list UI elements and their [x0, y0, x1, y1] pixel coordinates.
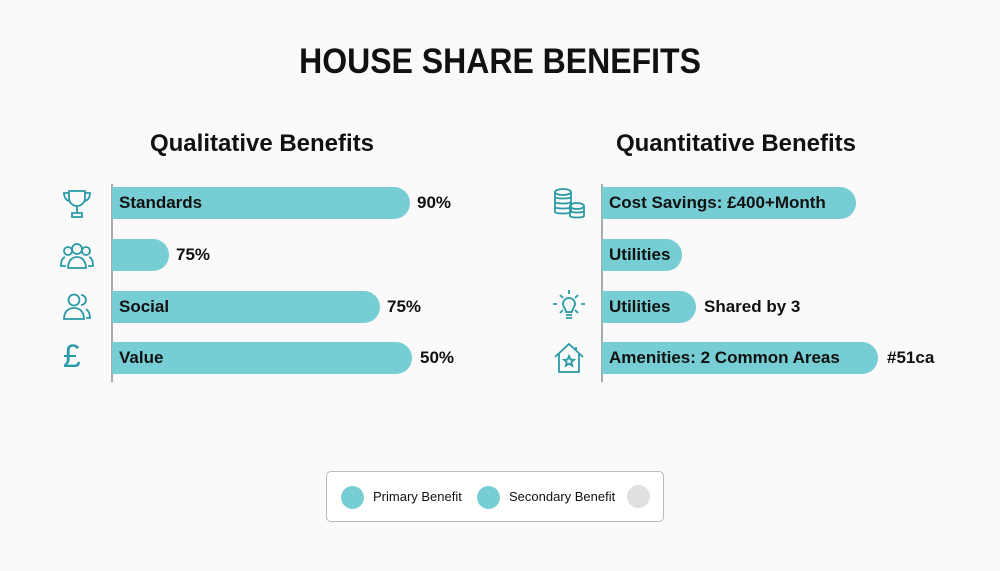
legend item: secondary [477, 486, 616, 509]
icon: coins [554, 188, 585, 218]
icon: lightbulb [553, 290, 585, 319]
bar: social: Social [119, 297, 169, 316]
bar: utilities shared: Utilities [609, 297, 670, 316]
heading: qualitative: Qualitative Benefits [150, 130, 374, 157]
icon: people [63, 294, 91, 320]
bar: amenities: Amenities: 2 Common Areas [609, 348, 840, 367]
legend item: primary [341, 486, 462, 509]
bar: cost savings [602, 187, 856, 219]
bar: standards [112, 187, 410, 219]
legend [326, 471, 664, 522]
bar: value: Value [119, 348, 163, 367]
title: HOUSE SHARE BENEFITS [299, 41, 701, 81]
bar: value [112, 342, 412, 374]
bar: standards: Standards [119, 193, 202, 212]
value: 50%: 50% [420, 348, 454, 367]
value: #51ca: #51ca [887, 348, 934, 367]
value: 75%: 75% [176, 245, 210, 264]
bar: amenities [602, 342, 878, 374]
panel: quantitative chart [553, 184, 934, 382]
legend item: primary: Primary Benefit [373, 489, 462, 504]
bar: social [112, 291, 380, 323]
bar: cost savings: Cost Savings: £400+Month [609, 193, 826, 212]
value: shared by 3: Shared by 3 [704, 297, 800, 316]
value: 75%: 75% [387, 297, 421, 316]
value: 90%: 90% [417, 193, 451, 212]
bar: utilities [602, 239, 682, 271]
icon: pound: £ [63, 338, 81, 374]
icon: trophy [63, 190, 91, 218]
heading: quantitative: Quantitative Benefits [616, 130, 856, 157]
legend item: grey [627, 485, 650, 508]
bar: utilities: Utilities [609, 245, 670, 264]
bar: utilities shared [602, 291, 696, 323]
legend item: secondary: Secondary Benefit [509, 489, 615, 504]
bar: unnamed [112, 239, 169, 271]
panel: qualitative chart [60, 184, 454, 382]
icon: group [60, 243, 94, 269]
icon: house [554, 342, 584, 373]
